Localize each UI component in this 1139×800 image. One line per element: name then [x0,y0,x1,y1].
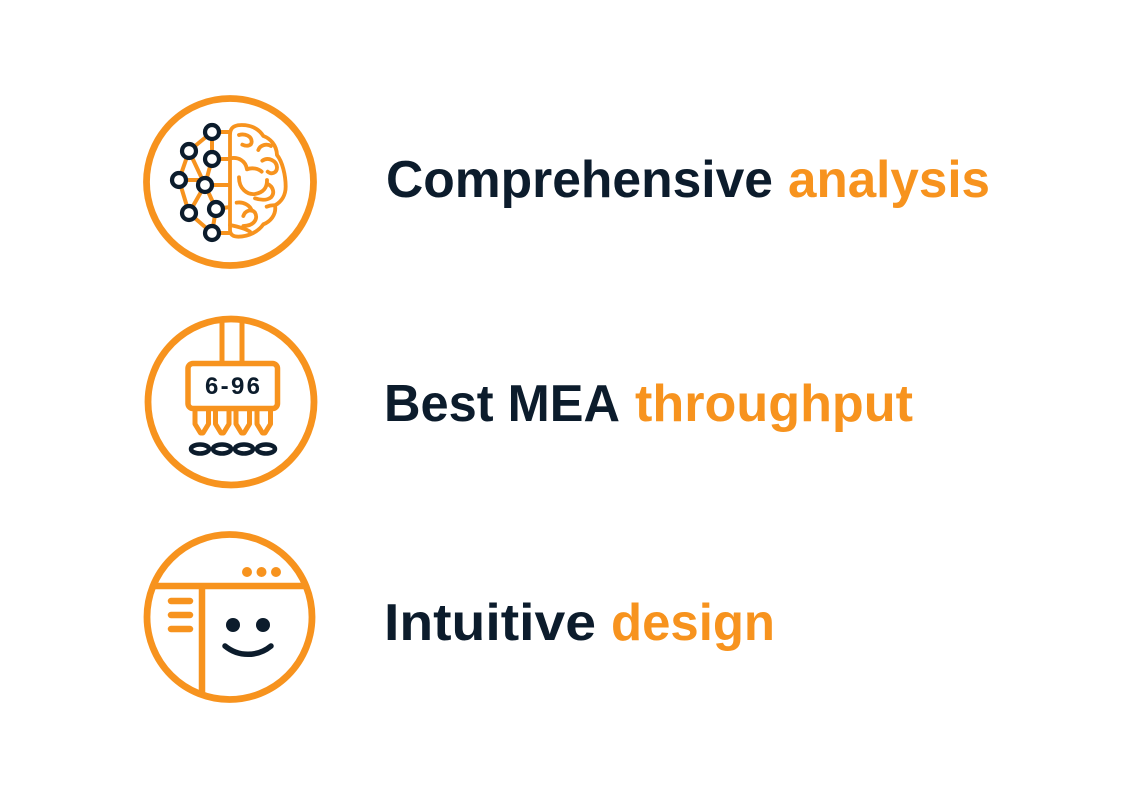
brain outline [230,125,286,237]
heading: Comprehensive analysis: analysis [788,151,990,209]
menu lines [171,601,190,629]
heading: Best MEA throughput: throughput [635,375,913,433]
droplets [191,444,275,454]
icon: multi-channel pipette head [148,319,314,485]
heading: Intuitive design: design [611,594,775,652]
icon: brain with neural network [146,98,314,266]
network nodes [172,125,223,240]
window dots [242,567,281,577]
label: 6-96: 6-96 [205,373,260,400]
heading: Best MEA throughput: Best MEA [384,375,620,433]
heading: Intuitive design: Intuitive [384,594,596,652]
pipette tips [195,410,270,433]
heading: Comprehensive analysis: Comprehensive [386,151,773,209]
smiley [225,618,271,654]
network connections [179,132,230,233]
icon: software window with smiley [147,534,312,700]
